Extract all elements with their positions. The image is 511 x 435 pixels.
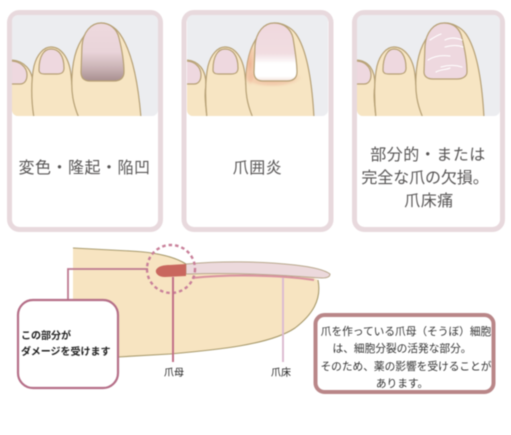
nail plate <box>186 262 330 278</box>
callout: damaged part: この部分が <box>21 329 71 342</box>
label: matrix: 爪母 <box>164 367 184 379</box>
caption: 爪床痛 <box>404 192 454 210</box>
diagram: finger cross-section <box>68 245 330 379</box>
illustration: toes with inflamed nail fold <box>185 23 314 118</box>
leader line: matrix <box>172 277 174 362</box>
caption: 完全な爪の欠損。 <box>361 169 489 187</box>
illustration: toes with damaged nail <box>355 23 484 118</box>
caption: 爪囲炎 <box>233 160 282 177</box>
dashed highlight circle <box>147 245 195 293</box>
nail bed <box>192 276 314 280</box>
text box: explanation: 爪を作っている爪母（そうぼ）細胞 <box>321 325 492 338</box>
callout: damaged part: ダメージを受けます <box>21 345 110 358</box>
text box: explanation <box>316 315 494 392</box>
caption: 変色・隆起・陥凹 <box>18 159 151 177</box>
text box: explanation: あります。 <box>376 378 428 390</box>
illustration: toes with discolored nail <box>10 23 141 118</box>
panel: nail loss <box>354 12 502 230</box>
caption: 部分的・または <box>370 146 486 164</box>
leader line: damaged area <box>68 269 148 301</box>
text box: explanation: は、細胞分裂の活発な部分。 <box>333 342 471 355</box>
leader line: nail bed <box>282 278 284 362</box>
panel: discoloration <box>10 12 160 230</box>
caption <box>361 146 489 210</box>
finger body <box>73 248 319 360</box>
label: nail bed: 爪床 <box>271 367 291 379</box>
callout: damaged part <box>18 300 118 388</box>
panel: paronychia <box>184 12 331 230</box>
text box: explanation: そのため、薬の影響を受けることが <box>320 360 492 373</box>
nail matrix <box>156 264 186 277</box>
